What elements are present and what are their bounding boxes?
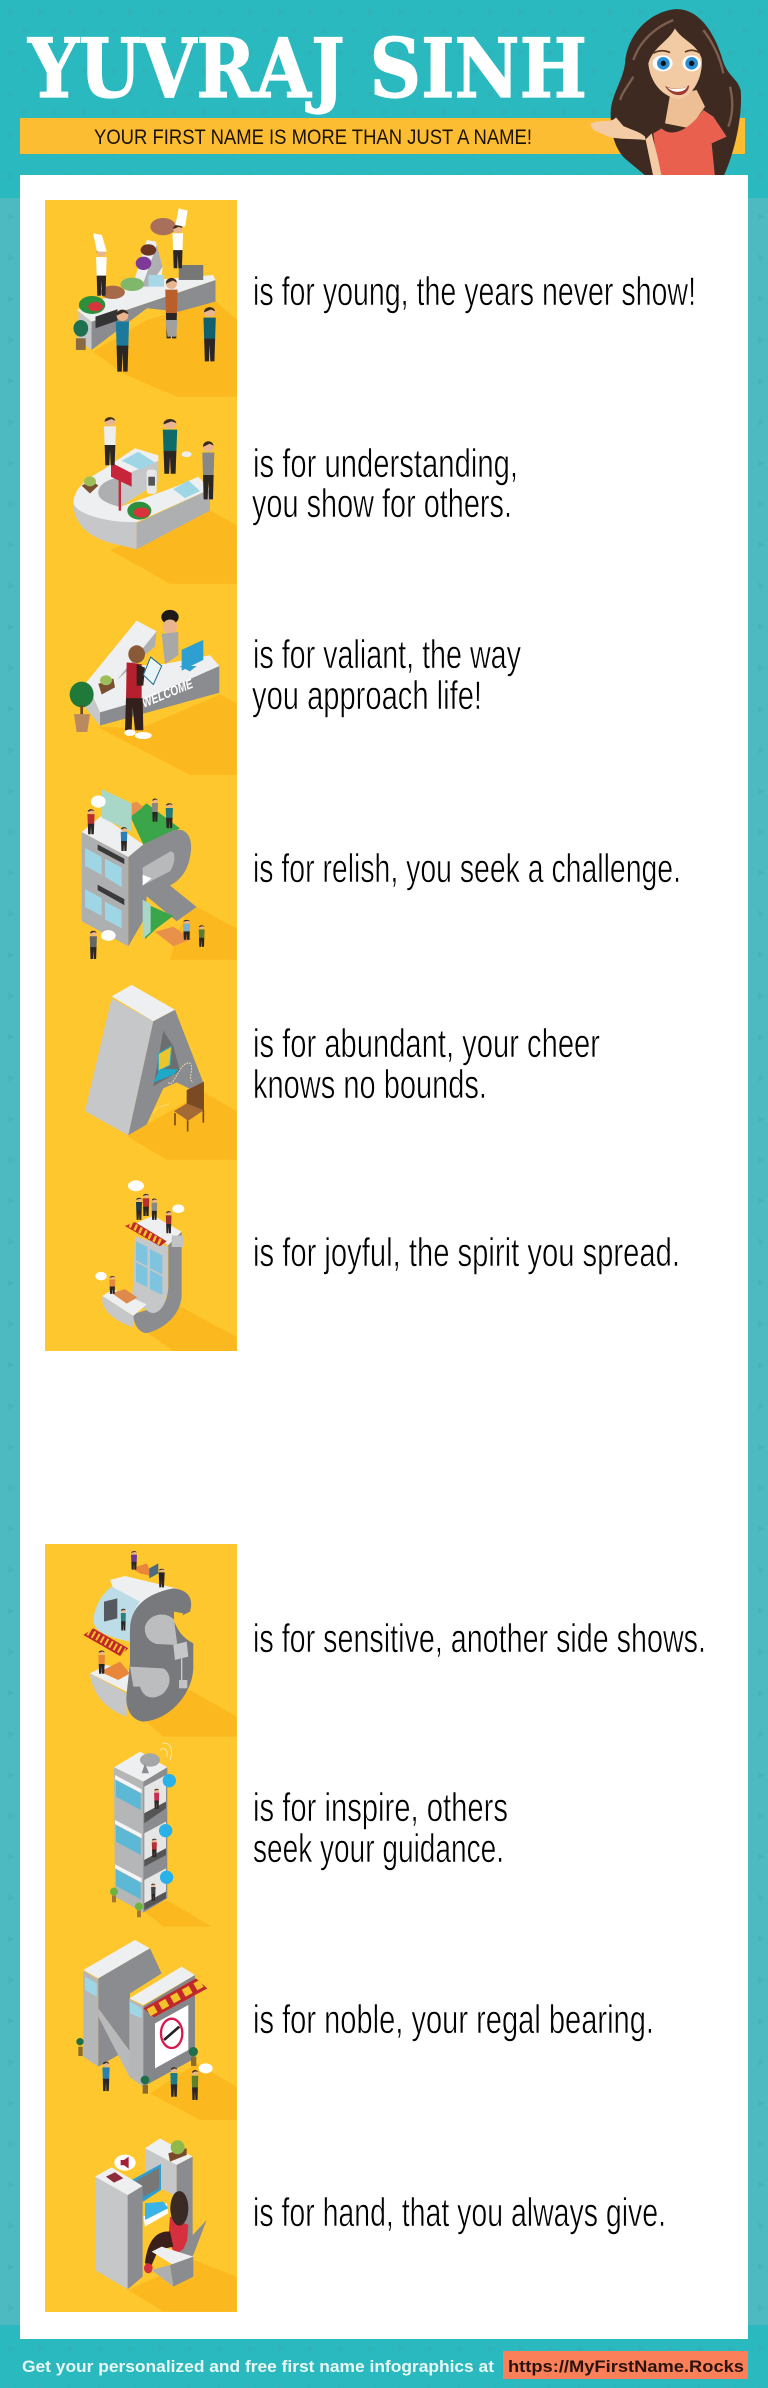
text block: A: is for abundant, your cheer	[253, 1022, 600, 1066]
footer	[22, 2351, 748, 2379]
text block: V: you approach life!	[252, 674, 482, 718]
footer: Get your personalized and free first name infographics at	[22, 2357, 494, 2376]
icon: letter R building	[82, 789, 237, 960]
text block: A	[253, 1022, 600, 1107]
footer link box	[503, 2351, 748, 2379]
icon: letter Y buffet	[73, 208, 237, 397]
text block: V: is for valiant, the way	[253, 633, 521, 677]
icon: letter I tower	[110, 1743, 212, 1927]
footer: https://MyFirstName.Rocks	[508, 2357, 744, 2376]
title: YUVRAJ SINH	[27, 22, 587, 117]
icon: letter H	[95, 2138, 237, 2312]
panel: illustration column S I N H	[45, 1544, 237, 2312]
icon: letter N	[76, 1940, 237, 2120]
icon: letter U counter	[73, 417, 237, 584]
icon: letter A	[85, 985, 237, 1160]
text block: U	[252, 442, 518, 526]
icon: letter S	[83, 1551, 237, 1737]
text block: I: is for inspire, others	[253, 1786, 508, 1830]
text block: I: seek your guidance.	[253, 1827, 504, 1871]
icon: letter V reception	[70, 610, 237, 775]
subtitle banner: YOUR FIRST NAME IS MORE THAN JUST A NAME!	[94, 126, 532, 149]
text block: A: knows no bounds.	[253, 1063, 487, 1107]
text block: U: you show for others.	[252, 482, 512, 526]
text block: V	[252, 633, 521, 718]
character: presenter woman	[590, 9, 741, 177]
subtitle banner	[20, 118, 745, 154]
panel: illustration column Y U V R A J	[45, 200, 237, 1351]
icon: letter V reception: WELCOME	[140, 675, 196, 711]
text block: U: is for understanding,	[253, 442, 518, 486]
text block: I	[253, 1786, 508, 1871]
icon: letter J	[95, 1180, 237, 1351]
